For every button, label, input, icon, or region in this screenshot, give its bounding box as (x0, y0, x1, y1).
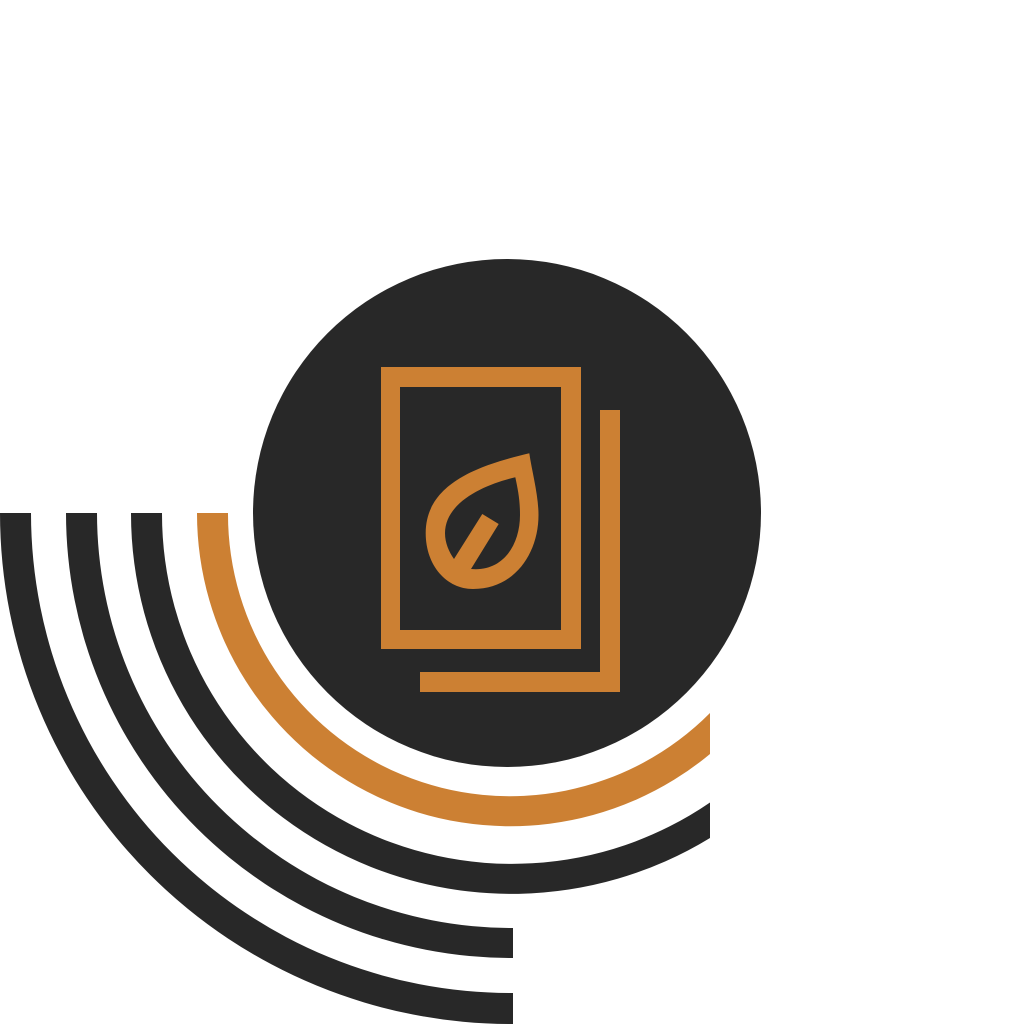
arc: third black (131, 513, 710, 894)
icon: back document edge (420, 410, 620, 692)
icon: leaf (426, 453, 538, 589)
arc: second black (66, 513, 513, 958)
dark circle (253, 259, 761, 767)
arc: orange (197, 513, 710, 826)
icon: documents with leaf (381, 367, 620, 692)
arc: outermost black (0, 513, 513, 1024)
icon: front document (381, 367, 581, 649)
